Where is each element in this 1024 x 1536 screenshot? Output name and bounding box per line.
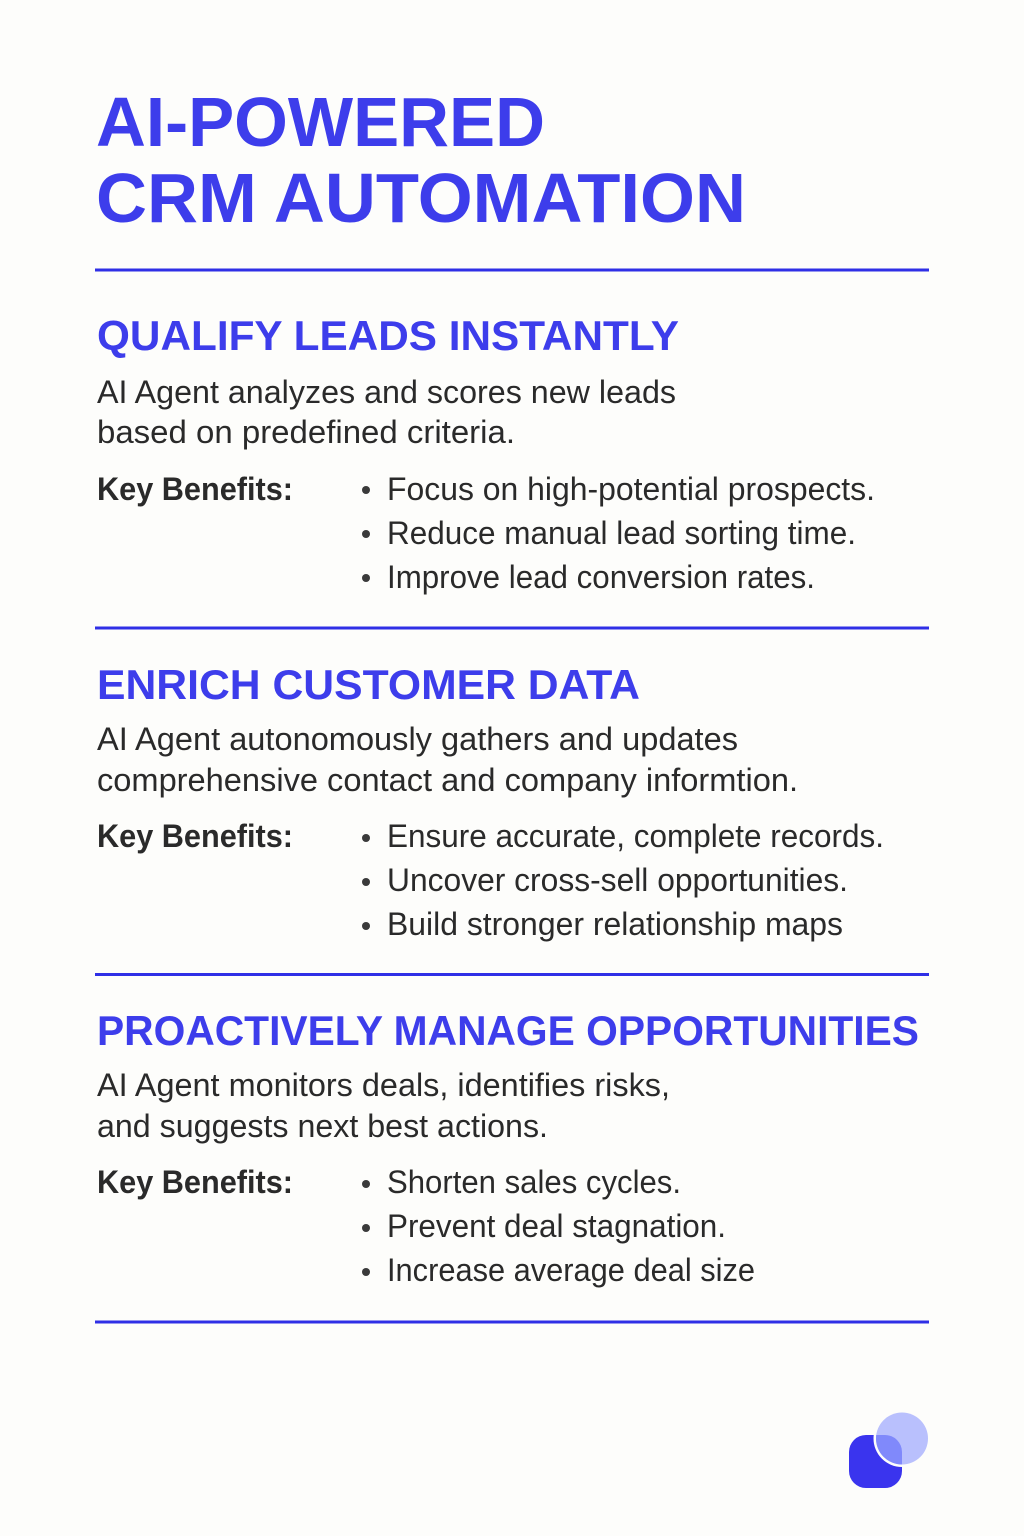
benefits list: Ensure accurate, complete records. — [387, 818, 884, 854]
benefits list: Shorten sales cycles. — [387, 1164, 681, 1200]
description: manage opportunities: and suggests next best actions. — [97, 1108, 548, 1144]
heading: qualify leads instantly: QUALIFY LEADS INSTANTLY — [97, 312, 679, 359]
key benefits label: Key Benefits: — [97, 818, 293, 854]
benefits list: Prevent deal stagnation. — [387, 1208, 726, 1244]
description: qualify leads: based on predefined criteria. — [97, 414, 515, 450]
description: manage opportunities: AI Agent monitors deals, identifies risks, — [97, 1067, 670, 1103]
title — [96, 83, 746, 237]
description: manage opportunities — [97, 1067, 670, 1144]
benefits list: Improve lead conversion rates. — [387, 559, 815, 595]
key benefits label: Key Benefits: — [97, 471, 293, 507]
heading: proactively manage opportunities: PROACTIVELY MANAGE OPPORTUNITIES — [97, 1007, 919, 1054]
benefits list — [362, 471, 875, 595]
key benefits label: Key Benefits: — [97, 1164, 293, 1200]
description: qualify leads: AI Agent analyzes and scores new leads — [97, 374, 676, 410]
panel: qualify leads instantly — [97, 312, 875, 595]
panel: proactively manage opportunities — [97, 1007, 919, 1288]
benefits list: Reduce manual lead sorting time. — [387, 515, 856, 551]
benefits list: Uncover cross-sell opportunities. — [387, 862, 848, 898]
benefits list — [362, 818, 884, 942]
description: enrich data: AI Agent autonomously gathers and updates — [97, 721, 738, 757]
panel: enrich customer data — [97, 661, 884, 942]
title: CRM AUTOMATION — [96, 159, 746, 237]
benefits list: Focus on high-potential prospects. — [387, 471, 875, 507]
benefits list — [362, 1164, 755, 1288]
heading: enrich customer data: ENRICH CUSTOMER DATA — [97, 661, 640, 708]
title: AI-POWERED — [96, 83, 545, 161]
benefits list: Build stronger relationship maps — [387, 906, 843, 942]
benefits list: Increase average deal size — [387, 1252, 755, 1288]
description: qualify leads — [97, 374, 676, 450]
icon: overlapping square and circle logo — [849, 1410, 930, 1488]
description: enrich data: comprehensive contact and company informtion. — [97, 762, 798, 798]
description: enrich data — [97, 721, 798, 798]
